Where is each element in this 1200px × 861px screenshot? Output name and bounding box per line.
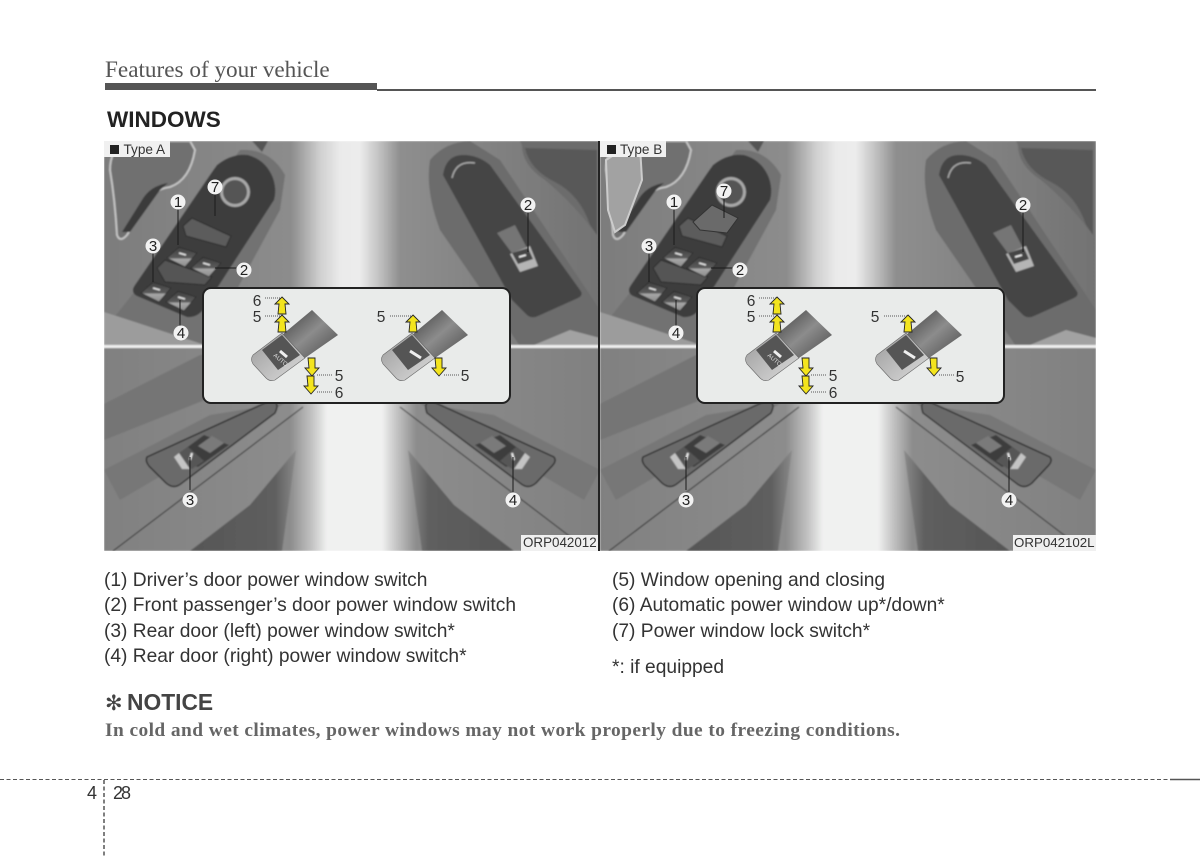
lock switches Type B <box>606 146 738 233</box>
AUTO switch: AUTO <box>766 353 783 368</box>
plain switch <box>876 310 962 381</box>
divider between panels <box>598 141 600 551</box>
running header: Features of your vehicle <box>105 57 330 83</box>
AUTO switch <box>746 310 832 381</box>
plain switch <box>382 310 468 381</box>
arrow labels: 5 <box>461 368 469 385</box>
callouts on Type A switches: 7 <box>211 179 219 196</box>
legend: right column: (6) Automatic power window up*/down* <box>612 595 945 616</box>
callout: switch operation A <box>203 288 510 403</box>
legend: left column: (1) Driver’s door power window switch <box>104 570 427 591</box>
arrow labels: 5 <box>253 309 261 326</box>
panel: Type B illustration <box>600 141 1096 551</box>
type B tag <box>600 141 666 157</box>
notice heading: NOTICE <box>127 689 213 715</box>
arrow labels <box>253 293 469 402</box>
arrow labels: 6 <box>747 293 755 310</box>
AUTO switch <box>252 310 338 381</box>
callouts on Type A switches: 3 <box>186 492 194 509</box>
callouts on Type A switches: 3 <box>149 238 157 255</box>
page number: 28 <box>113 783 131 803</box>
type A tag: Type A <box>124 142 166 157</box>
notice heading: ✻ <box>105 692 123 715</box>
callouts on Type B switches: 4 <box>672 325 680 342</box>
callouts on Type A switches: 2 <box>524 197 532 214</box>
legend: right column: (5) Window opening and closing <box>612 570 885 591</box>
section title: WINDOWS <box>107 107 221 132</box>
arrow labels: 5 <box>956 369 964 386</box>
callouts on Type B switches: 3 <box>682 492 690 509</box>
callouts on Type A switches: 1 <box>174 194 182 211</box>
arrow labels: 5 <box>747 309 755 326</box>
callouts on Type B switches: 4 <box>1005 492 1013 509</box>
callouts on Type B switches: 7 <box>720 183 728 200</box>
callouts on Type B switches: 3 <box>645 238 653 255</box>
arrow labels: 5 <box>871 309 879 326</box>
legend: right column <box>612 570 945 678</box>
legend: left column: (2) Front passenger’s door power window switch <box>104 595 516 616</box>
arrow labels: 6 <box>335 385 343 402</box>
callouts on Type A switches: 4 <box>509 492 517 509</box>
arrow labels: 5 <box>335 368 343 385</box>
callout: switch operation B <box>697 288 1004 403</box>
type B tag: Type B <box>620 142 662 157</box>
arrow labels: 5 <box>829 368 837 385</box>
legend: left column: (4) Rear door (right) power window switch* <box>104 646 467 667</box>
callouts on Type A switches: 2 <box>240 262 248 279</box>
legend: right column: (7) Power window lock switch* <box>612 621 871 642</box>
legend: left column: (3) Rear door (left) power window switch* <box>104 621 455 642</box>
type A tag <box>104 141 170 157</box>
image code B: ORP042102L <box>1014 535 1095 550</box>
AUTO switch: AUTO <box>272 353 289 368</box>
callouts on Type A switches <box>146 179 536 509</box>
notice body: In cold and wet climates, power windows may not work properly due to freezing conditions. <box>105 720 900 741</box>
arrow labels: 6 <box>829 385 837 402</box>
arrows <box>275 297 446 394</box>
arrow labels: 5 <box>377 309 385 326</box>
arrow labels: 6 <box>253 293 261 310</box>
callouts on Type B switches: 1 <box>670 194 678 211</box>
running header <box>105 57 1096 91</box>
image code A: ORP042012 <box>523 535 597 550</box>
arrows <box>770 297 941 394</box>
footer rule <box>0 780 1200 858</box>
panel: Type A illustration <box>104 141 600 551</box>
legend: right column: *: if equipped <box>612 657 724 678</box>
callouts on Type B switches: 2 <box>736 262 744 279</box>
callouts on Type B switches: 2 <box>1019 197 1027 214</box>
legend: left column <box>104 570 516 667</box>
callouts on Type B switches <box>642 183 1030 509</box>
arrow labels <box>747 293 964 402</box>
page number <box>87 783 131 803</box>
page number: 4 <box>87 783 97 803</box>
callouts on Type A switches: 4 <box>177 325 185 342</box>
